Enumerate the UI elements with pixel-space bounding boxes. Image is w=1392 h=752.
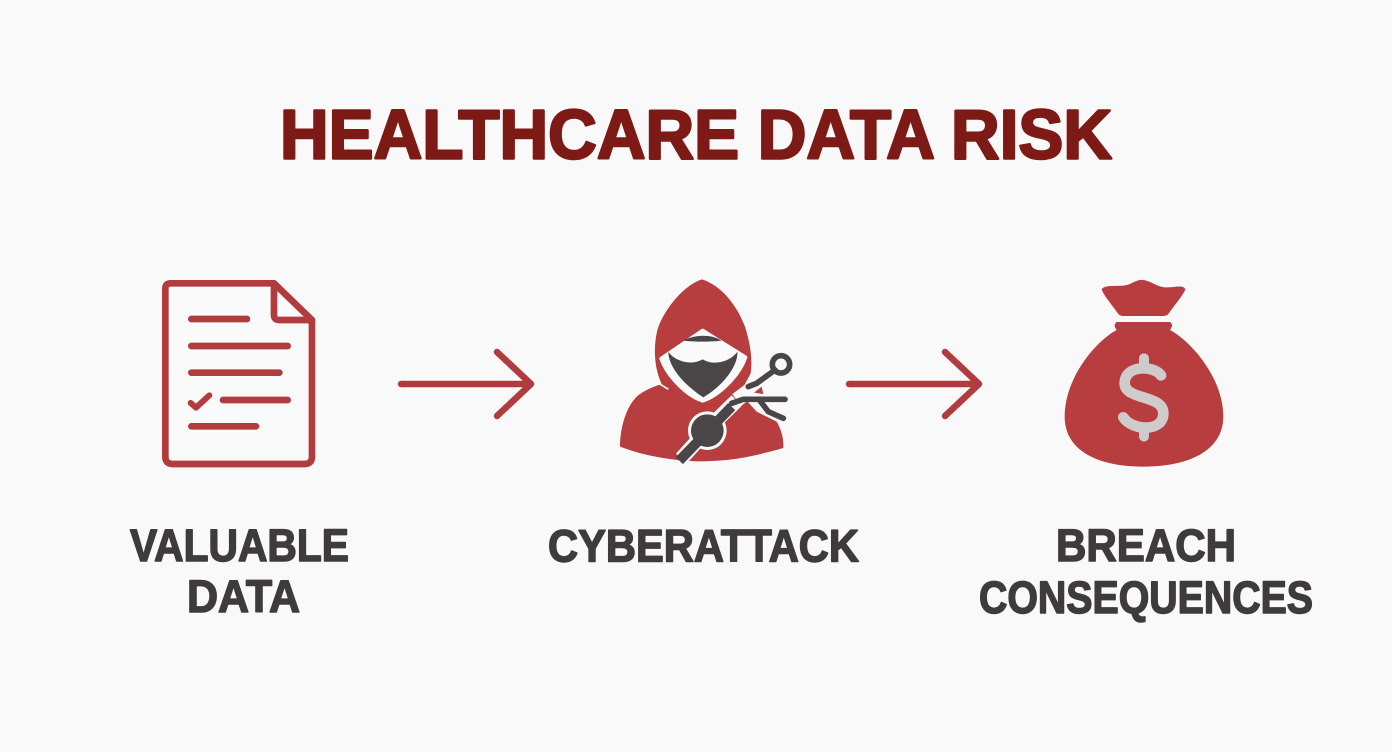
- icon: document: [165, 283, 312, 464]
- label: breach consequences: BREACH: [1056, 520, 1236, 571]
- bag tie: [1102, 280, 1185, 316]
- dollar sign: [1123, 358, 1163, 437]
- tool: [679, 356, 790, 461]
- label: cyberattack: CYBERATTACK: [548, 520, 859, 572]
- glasses brow: [683, 336, 722, 342]
- hood and shoulders: [620, 279, 783, 461]
- face opening: [661, 331, 745, 401]
- label: valuable data: DATA: [187, 571, 300, 622]
- icon: money bag: [1065, 280, 1223, 467]
- bag body: [1065, 322, 1223, 467]
- arrow 1: [401, 352, 531, 416]
- label: valuable data: [130, 520, 349, 622]
- tool outline: [681, 385, 757, 459]
- label: breach consequences: [979, 520, 1313, 623]
- hood crease: [659, 383, 668, 389]
- icon: hooded hacker: [620, 279, 790, 461]
- arrow 2: [849, 352, 979, 416]
- title: HEALTHCARE DATA RISK: [280, 96, 1112, 174]
- label: valuable data: VALUABLE: [130, 520, 349, 571]
- mask: [668, 352, 737, 397]
- label: breach consequences: CONSEQUENCES: [979, 572, 1313, 623]
